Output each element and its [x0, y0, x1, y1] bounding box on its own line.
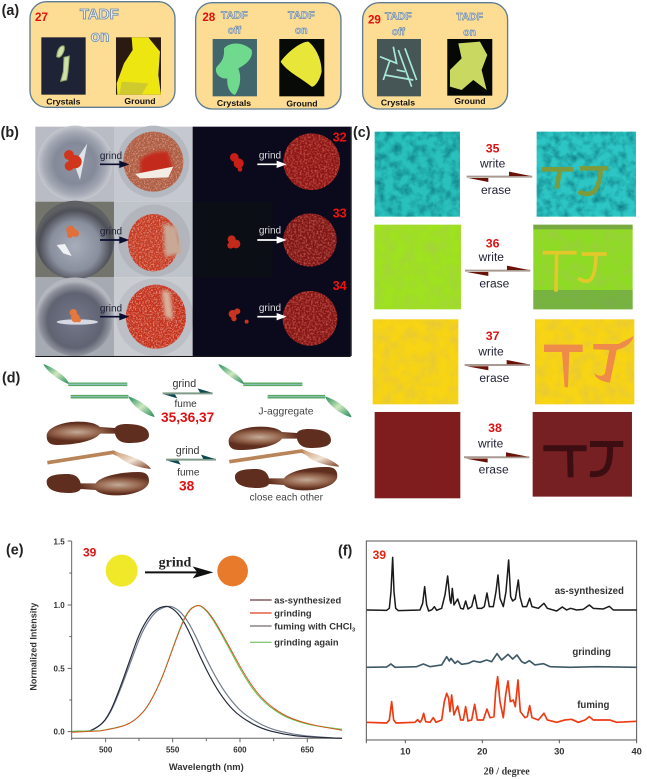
UV photographs: [35, 127, 352, 357]
brown molecules, after: [229, 427, 339, 490]
y tick labels: 0.5: [54, 664, 65, 673]
panel b: grinding photographs: [1, 125, 352, 357]
green J-aggregate molecules, after: [218, 364, 352, 417]
legend: 3: [352, 628, 355, 634]
panel c: write and erase tiles: [353, 125, 636, 498]
card 29: off: [392, 27, 405, 38]
close each other label: close each other: [250, 492, 324, 503]
y tick labels: 0.0: [54, 728, 65, 737]
x tick labels: 650: [301, 745, 315, 754]
row 36: 36: [486, 236, 500, 250]
panel a: TADF crystals and ground: [2, 2, 508, 109]
row 36: [374, 225, 633, 309]
card 29: Ground: [454, 96, 486, 106]
legend: grinding again: [274, 638, 339, 648]
grind and fume arrow, 35 36 37: [161, 378, 214, 425]
compound numbers 32 to 34: 32: [333, 130, 347, 144]
grind and fume arrow, 35 36 37: 35,36,37: [161, 410, 214, 425]
x tick labels: 550: [166, 745, 180, 754]
card 29: on: [463, 27, 476, 38]
as-synthesized trace: [367, 557, 637, 611]
panel f: XRD patterns: [338, 541, 642, 777]
trace labels: grinding: [572, 647, 611, 658]
card 27: TADF: [80, 6, 119, 23]
x axis title: Wavelength (nm): [169, 762, 244, 772]
x tick labels: [99, 745, 315, 754]
legend: grinding: [274, 608, 312, 618]
grind arrows, black: grind: [100, 151, 122, 162]
card 29: 29: [368, 14, 381, 27]
label f: (f): [338, 544, 353, 560]
trace labels: as-synthesized: [555, 586, 624, 597]
legend: [250, 595, 355, 648]
row 37: [373, 319, 634, 404]
grind and fume arrow, 38: 38: [179, 478, 195, 493]
y tick labels: [54, 537, 65, 737]
panel e: emission spectra: [6, 537, 355, 772]
axes: [68, 541, 342, 742]
row 35: [375, 132, 636, 217]
brown molecules, before: [47, 422, 151, 495]
label c: (c): [353, 125, 371, 141]
legend: fuming with CHCl: [274, 621, 352, 631]
label a: (a): [2, 3, 19, 19]
label b: (b): [1, 125, 19, 141]
y tick labels: 1.5: [54, 537, 65, 546]
x tick labels: [400, 746, 642, 756]
card 27: [30, 2, 175, 107]
card 28: [196, 3, 341, 109]
trace labels: [555, 586, 624, 711]
sample circles and grind arrow: [106, 555, 248, 587]
grind and fume arrow, 38: grind: [176, 445, 200, 457]
card 27: on: [91, 29, 109, 46]
x tick labels: 40: [631, 746, 642, 756]
card 28: Crystals: [217, 98, 251, 108]
row 38: 38: [488, 421, 502, 435]
row 35: write: [479, 156, 506, 170]
x tick labels: 10: [400, 746, 411, 756]
row 38: erase: [479, 462, 509, 476]
label e: (e): [6, 542, 24, 558]
plot frame: [366, 541, 637, 743]
grinding trace: [367, 654, 637, 667]
compound number 39: 39: [373, 548, 386, 562]
row 36: erase: [479, 277, 510, 291]
fuming trace: [367, 677, 637, 723]
y tick labels: 1.0: [54, 601, 65, 610]
x tick labels: 30: [554, 746, 565, 756]
sample circles and grind arrow: grind: [159, 555, 192, 570]
card 28: Ground: [286, 98, 318, 108]
x axis title: 2θ / degree: [484, 766, 530, 777]
grind and fume arrow, 38: [166, 445, 216, 493]
J-aggregate label: J-aggregate: [258, 406, 314, 417]
trace labels: fuming: [577, 700, 609, 711]
row 35: 35: [486, 141, 500, 155]
card 28: on: [295, 26, 308, 37]
card 28: off: [228, 26, 241, 37]
card 28: TADF: [221, 11, 248, 22]
grind arrows, black: [100, 151, 129, 320]
spectrum curves: [72, 606, 342, 738]
label d: (d): [2, 370, 21, 386]
row 38: [375, 412, 632, 498]
card 29: TADF: [456, 12, 483, 23]
compound numbers 32 to 34: 33: [333, 206, 347, 220]
row 35: erase: [481, 183, 511, 197]
grind arrows, black: grind: [100, 226, 122, 237]
row 36: write: [478, 250, 504, 264]
grind arrows, white: grind: [259, 303, 281, 314]
x tick labels: 600: [233, 745, 247, 754]
panel d: molecular packing schematic: [2, 364, 352, 503]
compound number 39: 39: [83, 546, 97, 560]
legend: as-synthesized: [274, 595, 341, 605]
row 37: 37: [486, 329, 500, 343]
x tick labels: 20: [477, 746, 488, 756]
card 29: Crystals: [381, 97, 415, 107]
grind and fume arrow, 35 36 37: fume: [175, 399, 197, 410]
green J-aggregate molecules, before: [43, 364, 155, 417]
grind arrows, white: [257, 150, 287, 320]
row 37: erase: [479, 371, 510, 385]
card 27: Crystals: [46, 96, 81, 106]
grind arrows, white: grind: [259, 150, 281, 161]
grind arrows, white: grind: [259, 226, 281, 237]
card 28: 28: [202, 11, 216, 24]
card 29: TADF: [385, 12, 412, 23]
card 29: [363, 3, 508, 109]
card 28: TADF: [288, 11, 315, 22]
y axis title: Normalized Intensity: [29, 603, 39, 691]
grind arrows, black: grind: [100, 303, 122, 314]
daylight photographs: [35, 126, 194, 356]
grind and fume arrow, 35 36 37: grind: [172, 378, 196, 390]
card 27: 27: [35, 11, 48, 24]
card 27: Ground: [124, 96, 156, 106]
row 37: write: [477, 344, 504, 358]
row 38: write: [477, 436, 504, 450]
compound numbers 32 to 34: 34: [333, 279, 347, 293]
x tick labels: 500: [99, 745, 113, 754]
compound numbers 32 to 34: [333, 130, 347, 293]
grind and fume arrow, 38: fume: [177, 468, 200, 479]
